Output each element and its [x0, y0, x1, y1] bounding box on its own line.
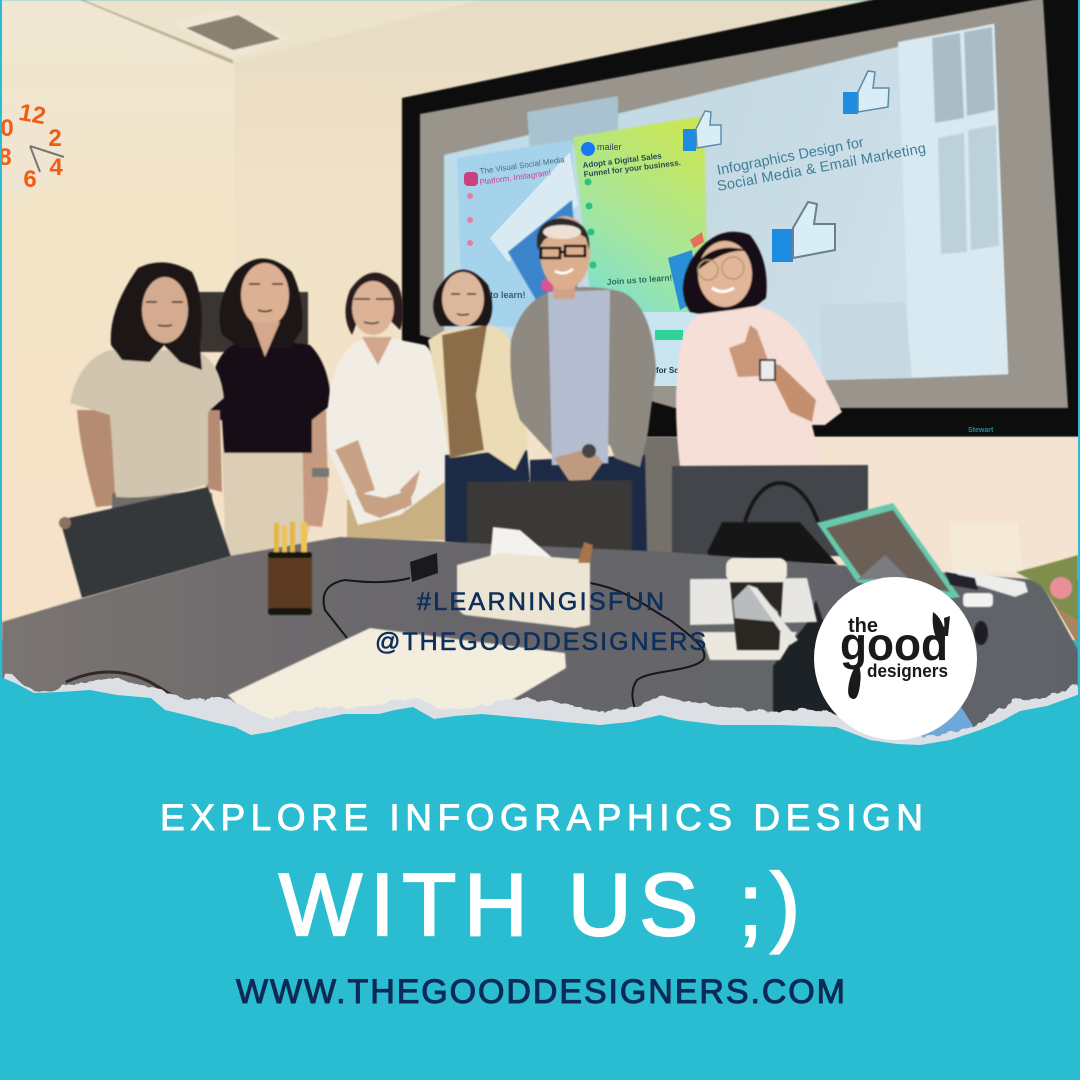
table: [2, 537, 1078, 760]
slide: facebook mailer card: Join us to learn!: [606, 272, 673, 287]
slide: thumbs up icons: [683, 71, 889, 262]
wall clock: 4: [49, 154, 63, 181]
logo brush: [933, 612, 950, 644]
photo hashtag caption: [375, 588, 706, 656]
slide: instagram card: to learn!: [490, 290, 526, 300]
office chairs and bag: [59, 465, 868, 598]
logo badge: the good designers: designers: [867, 661, 948, 681]
person 6: [676, 232, 842, 467]
slide: instagram card: The Visual Social Media: [479, 155, 566, 176]
projection screen: [402, 0, 1080, 437]
wall clock: 6: [23, 166, 37, 193]
photo: team in meeting room: [0, 0, 1080, 760]
person 4: [428, 270, 530, 545]
person 1: [70, 262, 224, 513]
photo hashtag caption: #LEARNINGISFUN: [417, 588, 664, 616]
person 2: [193, 258, 331, 557]
projection screen: Stewart: [968, 427, 994, 434]
torn paper edge: [0, 671, 1080, 800]
headline line 2: WITH US ;): [279, 855, 800, 954]
room walls and ceiling: [0, 0, 1080, 640]
slide: title: Social Media & Email Marketing: [716, 141, 927, 195]
slide: title: Infographics Design for: [716, 135, 865, 179]
photo hashtag caption: @THEGOODDESIGNERS: [375, 628, 706, 656]
window and sofa on slide: [527, 24, 1008, 380]
logo g tail: [848, 662, 861, 699]
website url: WWW.THEGOODDESIGNERS.COM: [236, 973, 845, 1011]
logo badge: the good designers: good: [840, 618, 948, 670]
wall clock: 2: [48, 125, 62, 152]
wall clock: 0: [0, 115, 14, 142]
slide: facebook mailer card: Adopt a Digital Sales: [582, 151, 663, 170]
slide: instagram card: Platform, Instagram!: [479, 168, 552, 187]
teal lower panel: [0, 676, 1080, 1080]
slide: facebook mailer card: for Sc: [656, 366, 679, 375]
slide: facebook mailer card: Funnel for your business.: [583, 158, 681, 179]
coffee cup: [726, 558, 798, 650]
wall clock: [0, 99, 65, 193]
tablet and props on table: [690, 503, 1078, 660]
logo badge: the good designers: [814, 577, 977, 740]
slide: instagram card: [457, 140, 578, 330]
wall clock: 12: [17, 99, 48, 130]
pencil cup: [268, 522, 312, 615]
person 5: [510, 216, 656, 553]
tissue box: [457, 527, 593, 628]
lower wall behind people: [640, 437, 1080, 587]
logo badge: the good designers: the: [848, 615, 878, 637]
slide: facebook mailer card: [573, 116, 712, 386]
teal edge strips: [0, 0, 1080, 700]
headline line 1: EXPLORE INFOGRAPHICS DESIGN: [160, 797, 923, 838]
slide: facebook mailer card: mailer: [597, 142, 622, 152]
person 3: [327, 273, 448, 540]
